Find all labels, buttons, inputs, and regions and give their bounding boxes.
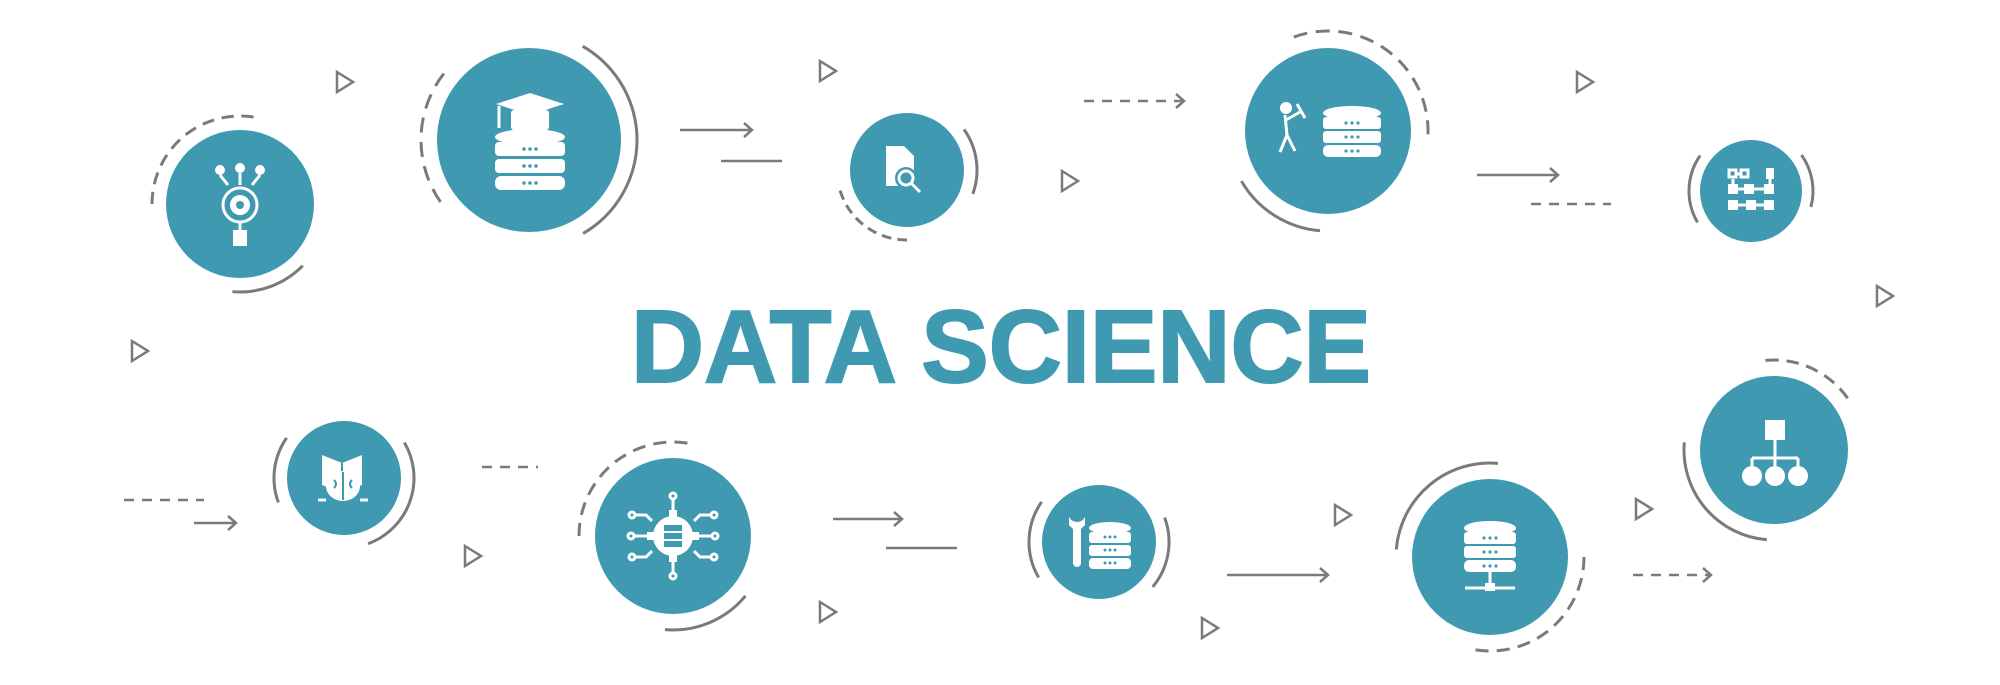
step 1: algorithm icon circle	[116, 80, 364, 328]
icon: network database	[1464, 521, 1516, 591]
icon: gear with server and nodes	[628, 493, 718, 579]
step 6: machine learning book brain circle	[248, 382, 440, 574]
icon: book and brain	[318, 455, 368, 501]
icon: wrench database	[1069, 517, 1131, 569]
step 3: document search circle	[810, 73, 1004, 267]
step 4: data mining circle	[1200, 3, 1456, 259]
step 5: structured data circle	[1665, 105, 1837, 277]
icon: graduation cap database	[495, 93, 565, 190]
step 8: database maintenance circle	[1003, 446, 1195, 638]
icon: algorithm gear	[215, 163, 265, 246]
arrows and connector lines	[124, 94, 1711, 582]
title: DATA SCIENCE	[631, 289, 1371, 404]
triangles	[132, 61, 1893, 638]
step 10: hierarchy circle	[1676, 352, 1872, 548]
step 2: education database circle	[379, 0, 679, 290]
icon: hierarchy chart	[1742, 420, 1808, 486]
step 9: networked database circle	[1388, 455, 1592, 659]
icon: grid blocks	[1728, 168, 1774, 210]
icon: miner with database	[1280, 102, 1381, 157]
step 7: gear network circle	[541, 404, 805, 668]
icon: document magnifier	[886, 146, 920, 192]
